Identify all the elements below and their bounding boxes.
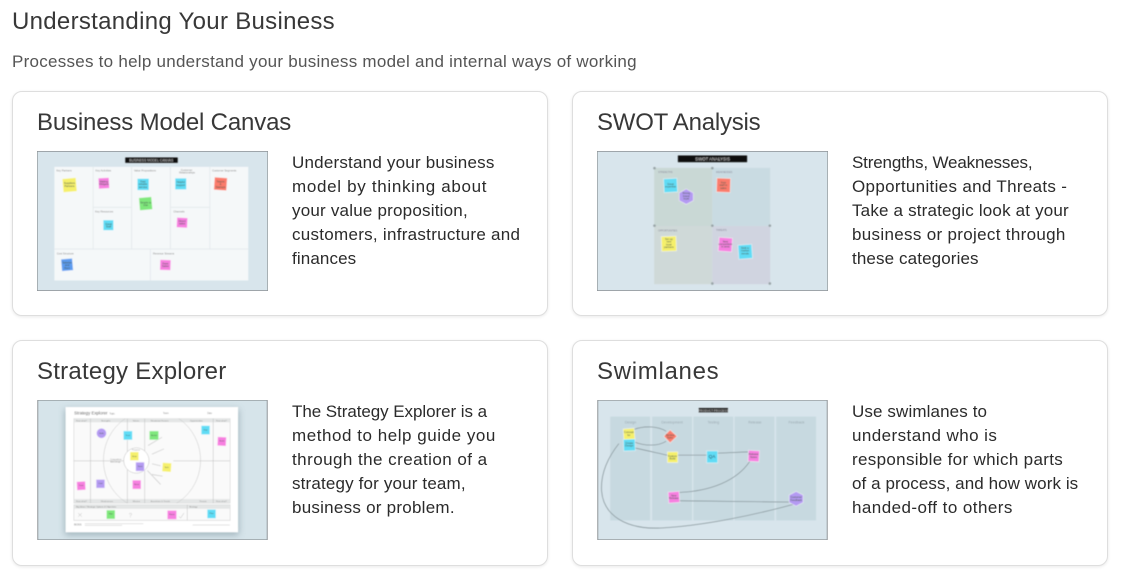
thumbnail: strategy explorer sheet: Assertions & Trends <box>151 500 170 503</box>
thumbnail: swimlanes board: Feedback <box>788 421 805 425</box>
thumbnail: business model canvas board: Use <box>143 203 149 207</box>
thumbnail: SWOT board: competitors <box>719 242 733 246</box>
thumbnail: business model canvas board: Relationships <box>179 171 196 175</box>
thumbnail: strategy explorer sheet: Strengths <box>101 419 110 422</box>
thumbnail: business model canvas board: Sales <box>162 264 169 268</box>
thumbnail: strategy explorer sheet: Now what? <box>76 419 88 422</box>
thumbnail: strategy explorer sheet: Now what? <box>76 500 88 503</box>
thumbnail: SWOT board: OPPORTUNITIES <box>658 231 678 233</box>
thumbnail: business model canvas board: BUSINESS MODEL CANVAS <box>129 158 174 162</box>
thumbnail: strategy explorer sheet: Mission <box>133 501 141 503</box>
description: through the creation of a <box>292 450 488 469</box>
thumbnail: business model canvas board: Fast <box>140 180 146 184</box>
thumbnail: swimlanes board: Design <box>625 421 636 425</box>
thumbnail: SWOT board: brand <box>683 194 690 198</box>
thumbnail: business model canvas board: Simple to <box>140 200 152 204</box>
thumbnail: SWOT board: market <box>741 249 749 253</box>
thumbnail: business model canvas board: Customer <box>181 168 192 172</box>
thumbnail: strategy explorer sheet: Grow <box>132 455 137 458</box>
heading: Business Model Canvas: Business Model Canvas <box>37 109 291 136</box>
thumbnail: strategy explorer sheet: Trust <box>125 434 130 437</box>
thumbnail: strategy explorer sheet: Scale <box>219 441 225 443</box>
thumbnail: SWOT board: loyal <box>684 197 689 201</box>
thumbnail: business model canvas board: Teams <box>217 180 225 184</box>
description <box>852 153 1069 268</box>
description: business or problem. <box>292 498 455 517</box>
description: handed-off to others <box>852 498 1013 517</box>
thumbnail: strategy explorer sheet: Competitive <box>110 458 122 461</box>
thumbnail: swimlanes board: PRODUCT PROCESS <box>698 408 728 412</box>
description <box>292 153 520 268</box>
thumbnail: business model canvas board: reliable <box>139 182 148 186</box>
thumbnail: swimlanes board: Concept <box>624 430 634 434</box>
thumbnail: business model canvas board: Key Resources <box>95 209 114 213</box>
description <box>852 402 1078 517</box>
description: Opportunities and Threats - <box>852 177 1067 196</box>
heading: Swimlanes: Swimlanes <box>597 358 719 385</box>
description: of a process, and how work is <box>852 474 1078 493</box>
thumbnail: business model canvas board: service <box>139 185 148 189</box>
thumbnail: swimlanes board: Development <box>661 421 683 425</box>
thumbnail: swimlanes board: QA <box>709 454 716 459</box>
panel: Business Model Canvas <box>12 91 548 316</box>
thumbnail: SWOT board: Few <box>721 181 726 185</box>
thumbnail: business model canvas board: Helpful <box>177 180 185 184</box>
thumbnail: swimlanes board: Create <box>625 441 634 445</box>
thumbnail: business model canvas board: Fees <box>162 261 169 265</box>
thumbnail: swimlanes board: New <box>671 493 676 497</box>
thumbnail: swimlanes board <box>597 400 828 540</box>
heading: Strategy Explorer: Strategy Explorer <box>37 358 226 385</box>
thumbnail: SWOT board: STRENGTHS <box>658 172 673 174</box>
thumbnail: business model canvas board: Customer Segments <box>212 169 237 173</box>
thumbnail: swimlanes board: Release <box>748 421 762 425</box>
thumbnail: business model canvas board: Startups <box>216 185 226 189</box>
thumbnail: SWOT board: Set up <box>665 237 673 241</box>
description <box>292 402 496 517</box>
thumbnail: strategy explorer sheet: Now what? <box>216 500 228 503</box>
thumbnail: strategy explorer sheet: BOSS <box>74 523 82 527</box>
thumbnail: business model canvas board: and <box>65 263 70 267</box>
thumbnail: business model canvas board: & <box>220 182 222 186</box>
thumbnail: strategy explorer sheet: Opportunities <box>190 419 203 422</box>
thumbnail: strategy explorer sheet: Strategy <box>189 506 198 509</box>
thumbnail: business model canvas board <box>37 151 268 291</box>
thumbnail: business model canvas board: Widgets <box>99 182 109 186</box>
thumbnail: strategy explorer sheet <box>37 400 268 540</box>
thumbnail: strategy explorer sheet: Pilot <box>109 513 113 516</box>
thumbnail: SWOT board: Strong <box>682 191 691 195</box>
description: understand who is <box>852 426 997 445</box>
thumbnail: SWOT board: trends <box>741 251 749 255</box>
description: responsible for which parts <box>852 450 1063 469</box>
thumbnail: business model canvas board: Salaries <box>62 260 73 264</box>
description: strategy for your team, <box>292 474 466 493</box>
description: your value proposition, <box>292 201 468 220</box>
thumbnail: strategy explorer sheet: Topic <box>109 413 116 415</box>
panel: SWOT Analysis <box>572 91 1108 316</box>
thumbnail: swimlanes board: Feature <box>668 454 678 458</box>
thumbnail: strategy explorer sheet: Date <box>207 412 213 415</box>
thumbnail: SWOT board: New <box>723 239 728 243</box>
thumbnail: swimlanes board: Notes <box>750 455 758 459</box>
thumbnail: swimlanes board: Testing <box>708 421 719 425</box>
description: Strengths, Weaknesses, <box>852 153 1032 172</box>
thumbnail: strategy explorer sheet: Team <box>163 413 169 415</box>
thumbnail: strategy explorer sheet: Train <box>79 484 83 487</box>
thumbnail: business model canvas board: Key Partners <box>56 169 72 173</box>
thumbnail: swimlanes board: Release <box>669 496 679 500</box>
thumbnail: SWOT board: local <box>666 242 672 246</box>
thumbnail: strategy explorer sheet: Team <box>138 466 143 468</box>
thumbnail: business model canvas board: Value Propositions <box>134 169 157 173</box>
thumbnail: business model canvas board: Channels <box>173 210 185 214</box>
subtitle: Processes to help understand your business model and internal ways of working <box>12 52 637 71</box>
thumbnail: SWOT board: expertise <box>665 185 676 189</box>
description: Take a strategic look at your <box>852 201 1069 220</box>
heading: SWOT Analysis: SWOT Analysis <box>597 109 760 136</box>
thumbnail: business model canvas board: Rent <box>64 266 70 270</box>
thumbnail: business model canvas board: Making <box>100 180 109 184</box>
thumbnail: SWOT board: WEAKNESSES <box>716 171 733 174</box>
thumbnail: SWOT board: sales <box>720 186 727 190</box>
description: customers, infrastructure and <box>292 225 520 244</box>
thumbnail: business model canvas board: sales <box>179 222 186 226</box>
description: method to help guide you <box>292 426 496 445</box>
thumbnail: strategy explorer sheet: Gap <box>204 430 208 432</box>
thumbnail: strategy explorer sheet: Threats <box>199 500 207 503</box>
thumbnail: SWOT board: THREATS <box>716 229 727 232</box>
thumbnail: strategy explorer sheet: Strategy Explorer <box>74 411 108 416</box>
title: Understanding Your Business <box>12 8 335 35</box>
thumbnail: strategy explorer sheet: Purpose <box>132 449 141 452</box>
thumbnail: business model canvas board: Suppliers <box>64 181 76 185</box>
thumbnail: strategy explorer sheet: Cost <box>98 482 103 485</box>
panel: Strategy Explorer <box>12 340 548 566</box>
thumbnail: swimlanes board: Design <box>625 444 634 448</box>
thumbnail: strategy explorer sheet: Skills <box>99 433 104 435</box>
description: these categories <box>852 249 979 268</box>
thumbnail: swimlanes board: Build <box>669 457 676 461</box>
thumbnail: SWOT board: new <box>666 241 671 244</box>
thumbnail: swimlanes board: Release <box>749 452 759 456</box>
thumbnail: business model canvas board: Revenue Streams <box>153 251 175 255</box>
thumbnail: strategy explorer sheet: ? <box>129 513 133 519</box>
description: finances <box>292 249 356 268</box>
thumbnail: strategy explorer sheet: Big Ideas / Strategic Options & Objectives <box>76 506 116 509</box>
thumbnail: business model canvas board: support <box>176 183 185 187</box>
panel: Swimlanes <box>572 340 1108 566</box>
thumbnail: business model canvas board: Great <box>105 222 112 226</box>
thumbnail: strategy explorer sheet: Now what? <box>216 419 228 422</box>
thumbnail: strategy explorer sheet: Focus <box>169 514 175 516</box>
thumbnail: business model canvas board: Direct <box>179 219 186 223</box>
description: Understand your business <box>292 153 495 172</box>
thumbnail: swimlanes board: Spec <box>667 436 674 440</box>
thumbnail: business model canvas board: Staff <box>106 225 112 229</box>
description: model by thinking about <box>292 177 487 196</box>
thumbnail: business model canvas board: Partners <box>64 184 75 188</box>
thumbnail: strategy explorer sheet: Market <box>151 434 157 437</box>
thumbnail: business model canvas board: Key Activities <box>96 169 112 173</box>
thumbnail: SWOT board: staff in <box>719 183 728 187</box>
thumbnail: strategy explorer sheet: Tech <box>165 467 169 469</box>
thumbnail: SWOT board: Shift in <box>741 246 750 250</box>
thumbnail: SWOT board: SWOT ANALYSIS <box>695 156 730 161</box>
thumbnail: swimlanes board: for <box>627 433 631 437</box>
description: The Strategy Explorer is a <box>292 402 487 421</box>
thumbnail: strategy explorer sheet: Serve <box>134 483 140 486</box>
thumbnail: strategy explorer sheet: Situational Factors <box>151 419 169 422</box>
thumbnail: SWOT board: partners <box>664 245 674 249</box>
description: business or project through <box>852 225 1066 244</box>
thumbnail: strategy explorer sheet: Weaknesses <box>101 501 113 503</box>
thumbnail: strategy explorer sheet: Plan <box>210 513 214 515</box>
thumbnail: SWOT board: in area <box>721 245 730 249</box>
thumbnail: SWOT board <box>597 151 828 291</box>
thumbnail: swimlanes board: Review <box>666 433 675 437</box>
thumbnail: SWOT board: Great <box>667 182 674 186</box>
thumbnail: business model canvas board: Cost Structure <box>57 251 74 255</box>
description: Use swimlanes to <box>852 402 987 421</box>
thumbnail: swimlanes board: Customer <box>790 495 802 499</box>
thumbnail: strategy explorer sheet: Advantage <box>110 461 122 464</box>
thumbnail: strategy explorer sheet: Values <box>133 420 139 422</box>
thumbnail: swimlanes board: Feedback <box>790 498 803 502</box>
